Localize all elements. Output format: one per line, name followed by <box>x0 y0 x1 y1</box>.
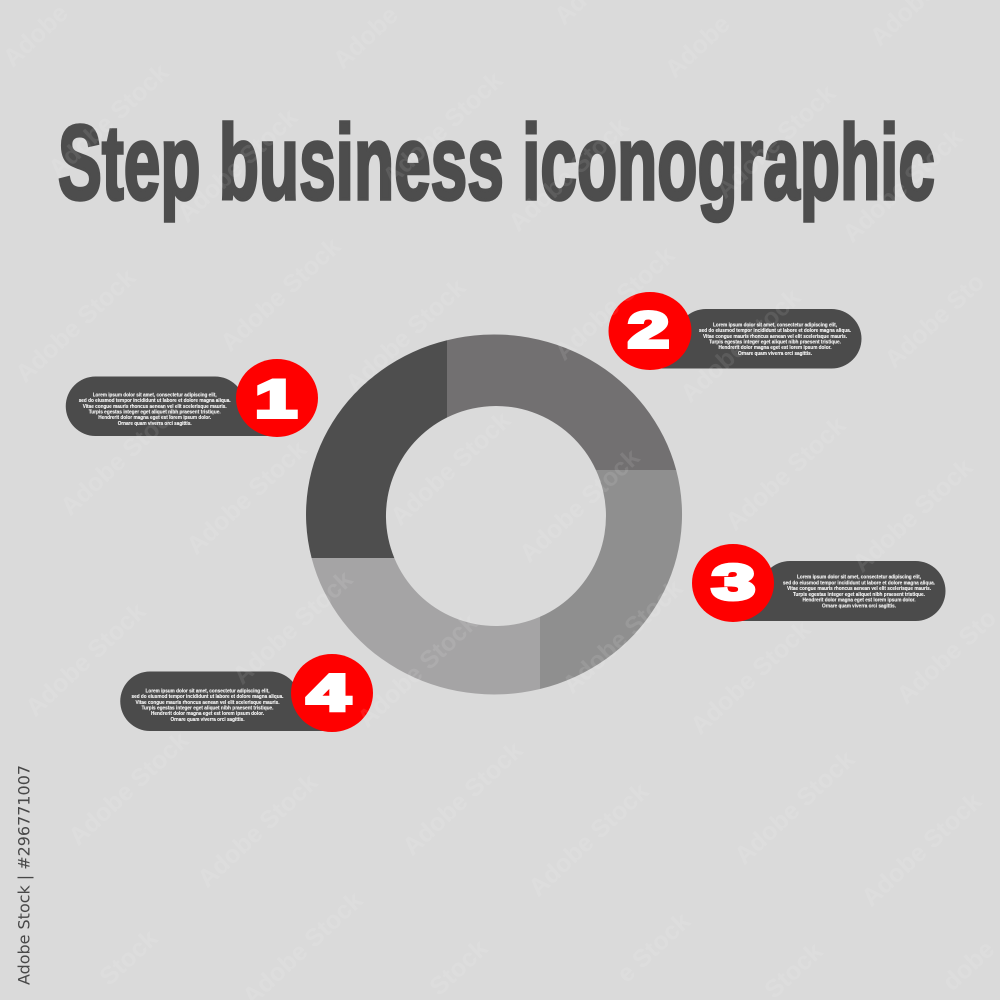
watermark pattern: Adobe Stock <box>385 406 516 531</box>
side credit: Adobe Stock | #296771007 <box>14 765 34 985</box>
callout 1 text <box>79 392 231 427</box>
watermark pattern: Adobe Stock <box>20 597 151 722</box>
badge 1: 1 <box>255 370 297 429</box>
callout 2 text <box>699 322 851 357</box>
segment 4 <box>312 558 540 694</box>
watermark pattern: Adobe Stock <box>720 411 851 536</box>
callout 3 text: Ornare quam viverra orci sagittis. <box>822 603 896 609</box>
callout 3 text: Vitae congue mauris rhoncus aenean vel elit scelerisque mauris. <box>787 586 931 592</box>
watermark pattern: Adobe Stock <box>729 745 860 870</box>
callout 2 text: Turpis egestas integer eget aliquet nibh praesent tristique. <box>709 340 841 346</box>
badge 4: 4 <box>307 664 351 721</box>
watermark pattern: Adobe Stock <box>549 241 680 366</box>
watermark pattern: Adobe Sto <box>879 268 990 374</box>
callout 3 text: Turpis egestas integer eget aliquet nibh praesent tristique. <box>793 592 925 598</box>
watermark pattern: Adobe Stock <box>227 565 358 690</box>
watermark pattern: Stock <box>94 924 163 991</box>
watermark pattern: Adobe Stock <box>215 232 346 357</box>
watermark pattern: Adobe Stock <box>710 79 841 204</box>
callout 2 text: Lorem ipsum dolor sit amet, consectetur adipiscing elit, <box>713 322 837 328</box>
watermark pattern: Adobe Stock <box>557 574 688 699</box>
watermark pattern: Adobe Stock <box>503 112 634 237</box>
callout 1 text: Vitae congue mauris rhoncus aenean vel elit scelerisque mauris. <box>83 404 227 410</box>
callout 4 text: Hendrerit dolor magna eget est lorem ipsum dolor. <box>151 711 264 717</box>
badge 3 <box>692 544 774 622</box>
callout 4 text: Lorem ipsum dolor sit amet, consectetur adipiscing elit, <box>146 688 270 694</box>
callout 2 text: Hendrerit dolor magna eget est lorem ipsum dolor. <box>718 345 832 351</box>
callout 2 pill <box>650 309 862 368</box>
callout 1 text: sed do eiusmod tempor incididunt ut labore et dolore magna aliqua. <box>79 398 231 404</box>
watermark pattern: Adobe Stock <box>181 435 312 560</box>
callout 2 <box>608 292 862 370</box>
callout 4 text: Ornare quam viverra orci sagittis. <box>170 717 245 723</box>
callout 4 text <box>132 688 284 723</box>
watermark pattern: Adobe Stock <box>837 123 968 248</box>
callout 4 <box>120 654 373 732</box>
callout 4 text: Vitae congue mauris rhoncus aenean vel elit scelerisque mauris. <box>136 700 280 706</box>
badge 4 <box>291 654 373 732</box>
watermark pattern: Adobe Stock <box>10 263 141 388</box>
callout 3 text: Hendrerit dolor magna eget est lorem ipsum dolor. <box>802 598 916 604</box>
callout 2 text: Vitae congue mauris rhoncus aenean vel elit scelerisque mauris. <box>703 334 847 340</box>
callout 2 text: sed do eiusmod tempor incididunt ut labore et dolore magna aliqua. <box>699 328 851 334</box>
callout 4 text: Turpis egestas integer eget aliquet nibh praesent tristique. <box>142 706 274 712</box>
callout 3 text: sed do eiusmod tempor incididunt ut labore et dolore magna aliqua. <box>783 580 935 586</box>
callout 1 text: Hendrerit dolor magna eget est lorem ipsum dolor. <box>98 415 212 421</box>
callout 1 text: Turpis egestas integer eget aliquet nibh praesent tristique. <box>89 410 221 416</box>
watermark pattern: e Stock <box>612 907 696 988</box>
watermark pattern: Adobe Stock <box>352 608 483 733</box>
watermark pattern: Adobe Stock <box>340 273 471 398</box>
watermark pattern: Adobe Stock <box>192 768 323 893</box>
watermark pattern: Adobe Stock <box>63 726 194 851</box>
watermark pattern: Adobe Sto <box>891 604 1000 710</box>
watermark pattern: Adobe Stock <box>377 66 508 191</box>
callout 1 pill <box>66 376 277 436</box>
segment 1 <box>306 340 447 558</box>
callout 1 text: Ornare quam viverra orci sagittis. <box>118 421 192 427</box>
callout 1 <box>66 359 318 437</box>
watermark pattern: Adobe <box>660 10 736 83</box>
watermark pattern: Adobe Stock <box>55 396 186 521</box>
watermark pattern: Adobe Stock <box>847 453 978 578</box>
watermark pattern: Adobe Stock <box>172 103 303 228</box>
callout 3 <box>692 544 946 622</box>
callout 3 pill <box>733 561 946 621</box>
segment 2 <box>447 334 676 470</box>
watermark pattern: Adobe Stock <box>43 58 174 183</box>
donut chart <box>306 334 682 694</box>
watermark pattern: Adobe <box>328 1 404 74</box>
badge 3: 3 <box>712 556 755 610</box>
watermark pattern: Stock <box>424 934 493 1000</box>
segment 3 <box>540 470 682 689</box>
badge 2 <box>608 292 692 370</box>
callout 2 text: Ornare quam viverra orci sagittis. <box>738 351 812 357</box>
watermark pattern: Adobe Stock <box>523 777 654 902</box>
watermark pattern: Adobe Stock <box>856 787 987 912</box>
badge 2: 2 <box>628 302 669 358</box>
watermark pattern: dobe <box>937 935 1000 996</box>
callout 4 pill <box>120 672 332 731</box>
badge 1 <box>236 359 318 437</box>
watermark pattern: Adobe Stock <box>675 283 806 408</box>
callout 3 text <box>783 575 935 609</box>
watermark pattern: Adobe Stock <box>514 443 645 568</box>
callout 1 text: Lorem ipsum dolor sit amet, consectetur adipiscing elit, <box>93 392 217 398</box>
watermark pattern: Adobe Stock <box>685 615 816 740</box>
callout 4 text: sed do eiusmod tempor incididunt ut labore et dolore magna aliqua. <box>132 694 284 700</box>
watermark pattern: Adobe Stock <box>397 736 528 861</box>
callout 3 text: Lorem ipsum dolor sit amet, consectetur adipiscing elit, <box>797 575 921 581</box>
